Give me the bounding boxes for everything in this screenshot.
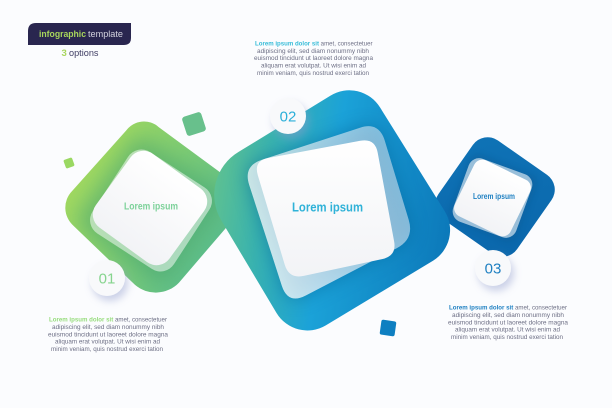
- text block 01: [48, 317, 169, 353]
- small square: green upper: [181, 111, 207, 137]
- panel 03: dark blue diamond: [436, 137, 555, 256]
- panel 02: main blue diamond: [214, 90, 450, 330]
- translucent back card 01: [84, 143, 218, 278]
- text block 02: adipiscing elit, sed diam nonummy nibh: [257, 48, 370, 55]
- text block 03: adipiscing elit, sed diam nonummy nibh: [452, 312, 565, 319]
- text block 01: aliquam erat volutpat. Ut wisi enim ad: [55, 339, 161, 346]
- header badge: [28, 23, 131, 45]
- text block 03: minim veniam, quis nostrud exerci tation: [451, 334, 564, 341]
- card label 01: Lorem ipsum: [124, 202, 178, 212]
- number badge 01: 01: [99, 270, 115, 288]
- number badge 02: [270, 98, 306, 134]
- text block 03: euismod tincidunt ut laoreet dolore magna: [448, 319, 569, 326]
- number badge 03: 03: [485, 260, 501, 278]
- small square: blue: [380, 320, 396, 336]
- infographic canvas: [28, 23, 568, 352]
- white card 02: [257, 140, 395, 276]
- subtitle: 3 options: options: [69, 48, 99, 59]
- translucent back card 03: [450, 155, 535, 241]
- text block 01: euismod tincidunt ut laoreet dolore magna: [48, 331, 169, 338]
- card label 03: Lorem ipsum: [473, 192, 515, 201]
- translucent back card 02: [248, 126, 410, 299]
- number badge 03: [475, 250, 511, 286]
- subtitle: 3 options: 3: [62, 48, 67, 59]
- white card 01: [86, 144, 214, 272]
- panel 01: green diamond: [65, 121, 240, 293]
- card label 02: Lorem ipsum: [292, 200, 363, 214]
- text block 01: adipiscing elit, sed diam nonummy nibh: [52, 324, 165, 331]
- header badge: template: [88, 28, 123, 39]
- text block 02: minim veniam, quis nostrud exerci tation: [257, 70, 370, 77]
- number badge 02: 02: [280, 108, 296, 126]
- text block 03: [448, 305, 569, 341]
- text block 03: aliquam erat volutpat. Ut wisi enim ad: [455, 327, 561, 334]
- text block 02: aliquam erat volutpat. Ut wisi enim ad: [261, 62, 367, 70]
- text block 02: euismod tincidunt ut laoreet dolore magna: [254, 55, 374, 62]
- text block 02: Lorem ipsum dolor sit amet, consectetuer: [255, 40, 372, 48]
- number badge 01: [89, 260, 125, 296]
- small square: green lower: [63, 157, 75, 169]
- header badge: infographic: [39, 28, 86, 39]
- text block 03: Lorem ipsum dolor sit amet, consectetuer: [449, 305, 567, 312]
- text block 01: Lorem ipsum dolor sit amet, consectetuer: [49, 317, 167, 324]
- white card 03: [451, 157, 534, 239]
- text block 02: [254, 40, 374, 77]
- text block 01: minim veniam, quis nostrud exerci tation: [51, 346, 164, 353]
